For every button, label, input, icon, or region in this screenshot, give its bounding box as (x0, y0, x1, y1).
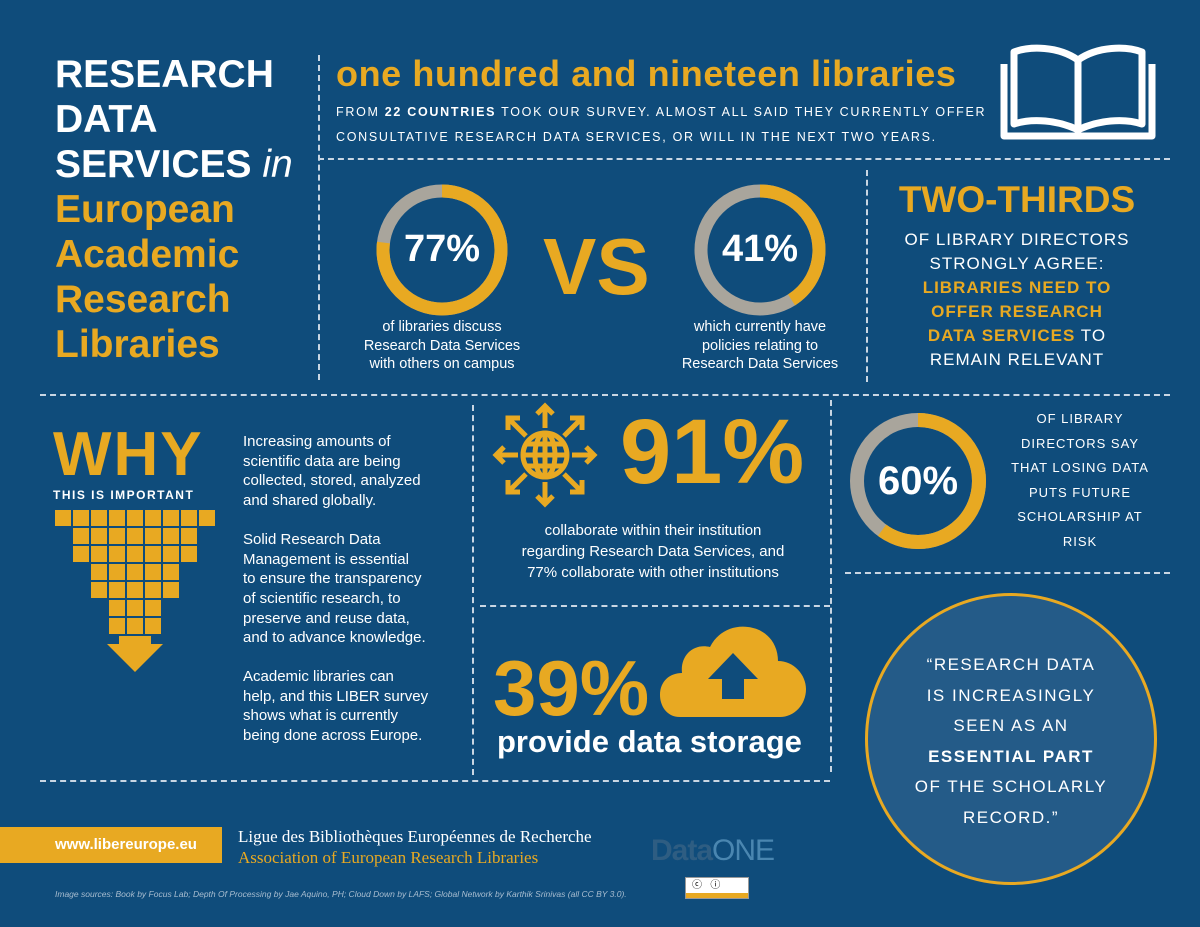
title: RESEARCH (55, 53, 274, 96)
stat: 39%: 39% (493, 644, 649, 732)
text: 60% caption: SCHOLARSHIP AT (1017, 509, 1143, 524)
donut: 60%: 60% (878, 459, 958, 503)
title (55, 53, 293, 366)
callout: quote circle: SEEN AS AN (953, 716, 1069, 735)
text: why paragraphs: shows what is currently (243, 707, 398, 724)
text: why paragraphs: Management is essential (243, 551, 409, 568)
icon: CC BY badge (685, 877, 749, 899)
callout: quote circle: OF THE SCHOLARLY (915, 777, 1107, 796)
text: 91% caption: regarding Research Data Services, and (522, 543, 784, 560)
text: why paragraphs: of scientific research, to (243, 590, 401, 607)
text: why paragraphs: Solid Research Data (243, 531, 381, 548)
text: why paragraphs: Academic libraries can (243, 668, 394, 685)
panel: two-thirds: LIBRARIES NEED TO (923, 278, 1111, 297)
text: why paragraphs (243, 433, 428, 744)
footer: website bar (0, 827, 222, 863)
text: why paragraphs: help, and this LIBER survey (243, 688, 428, 705)
headline: libraries surveyed (336, 53, 986, 144)
text: 60% caption: OF LIBRARY (1036, 411, 1124, 426)
text: 60% caption: THAT LOSING DATA (1011, 460, 1149, 475)
logo: DataONE: DataONE (651, 834, 774, 867)
donut: 41% (694, 184, 826, 316)
text: why paragraphs: scientific data are being (243, 453, 401, 470)
title: Academic (55, 233, 239, 276)
text: why paragraphs: and to advance knowledge. (243, 629, 426, 646)
callout: quote circle (865, 593, 1157, 885)
icon: open book (1000, 44, 1156, 140)
callout: quote circle: IS INCREASINGLY (927, 686, 1095, 704)
icon: globe network (492, 402, 598, 508)
title: DATA (55, 98, 158, 141)
panel: two-thirds: REMAIN RELEVANT (930, 350, 1104, 369)
icon: funnel arrow (55, 510, 215, 672)
icon: CC BY badge: ⓒ ⓘ (692, 880, 720, 891)
donut: 77% (376, 184, 508, 316)
text: why paragraphs: collected, stored, analyzed (243, 472, 421, 489)
text: 41% caption (682, 319, 838, 372)
footer: image sources: Image sources: Book by Focus Lab; Depth Of Processing by Jae Aquino, PH; Cloud Down by LAFS; Global Network by Karthik Srinivas (all CC BY 3.0). (55, 889, 627, 899)
text: why paragraphs: to ensure the transparency (243, 570, 421, 587)
panel: two-thirds: OF LIBRARY DIRECTORS (904, 230, 1130, 249)
text: 77% caption (364, 319, 520, 372)
callout: quote circle: RECORD.” (963, 808, 1059, 826)
text: 60% caption: DIRECTORS SAY (1021, 436, 1139, 450)
text: provide data storage: provide data storage (497, 724, 802, 759)
text: 41% caption: policies relating to (702, 338, 818, 354)
footer: organisation name (238, 827, 592, 867)
text: 60% caption (1011, 411, 1149, 548)
heading: why: THIS IS IMPORTANT (53, 488, 194, 502)
title: European (55, 188, 235, 231)
headline: libraries surveyed: FROM 22 COUNTRIES TOOK OUR SURVEY. ALMOST ALL SAID THEY CURRENTLY OFFER (336, 105, 986, 119)
text: 60% caption: RISK (1063, 534, 1097, 548)
stat: 91%: 91% (620, 401, 804, 503)
text: why paragraphs: preserve and reuse data, (243, 610, 410, 627)
donut: 60% (850, 413, 986, 549)
text: 77% caption: Research Data Services (364, 338, 520, 354)
footer: website bar: www.libereurope.eu (55, 836, 197, 853)
panel: two-thirds: TWO-THIRDS (899, 179, 1135, 220)
text: 77% caption: of libraries discuss (382, 319, 502, 335)
text: why paragraphs: being done across Europe. (243, 727, 422, 744)
text: 60% caption: PUTS FUTURE (1029, 484, 1131, 500)
callout: quote circle: “RESEARCH DATA (927, 655, 1095, 674)
panel: two-thirds: DATA SERVICES TO (928, 326, 1106, 345)
donut: 41%: 41% (722, 228, 798, 270)
headline: libraries surveyed: CONSULTATIVE RESEARCH DATA SERVICES, OR WILL IN THE NEXT TWO YEARS. (336, 130, 937, 144)
VS: VS (543, 222, 650, 311)
panel: two-thirds: STRONGLY AGREE: (930, 254, 1104, 273)
text: why paragraphs: and shared globally. (243, 492, 376, 509)
panel: two-thirds (899, 179, 1135, 369)
text: 41% caption: which currently have (694, 319, 826, 335)
text: 41% caption: Research Data Services (682, 356, 838, 372)
text: why paragraphs: Increasing amounts of (243, 433, 391, 450)
text: 91% caption (522, 522, 784, 581)
heading: why: WHY (53, 420, 204, 489)
footer: organisation name: Association of European Research Libraries (238, 848, 538, 867)
text: 91% caption: collaborate within their institution (545, 522, 761, 539)
footer: organisation name: Ligue des Bibliothèques Européennes de Recherche (238, 827, 592, 846)
title: SERVICES in (55, 143, 293, 186)
title: Research (55, 278, 231, 321)
callout: quote circle: ESSENTIAL PART (928, 746, 1094, 766)
donut: 77%: 77% (404, 228, 480, 270)
headline: libraries surveyed: one hundred and nineteen libraries (336, 53, 956, 94)
panel: two-thirds: OFFER RESEARCH (931, 302, 1103, 321)
icon: cloud upload (660, 626, 806, 717)
title: Libraries (55, 323, 220, 366)
text: 77% caption: with others on campus (369, 356, 515, 372)
text: 91% caption: 77% collaborate with other institutions (527, 564, 779, 581)
